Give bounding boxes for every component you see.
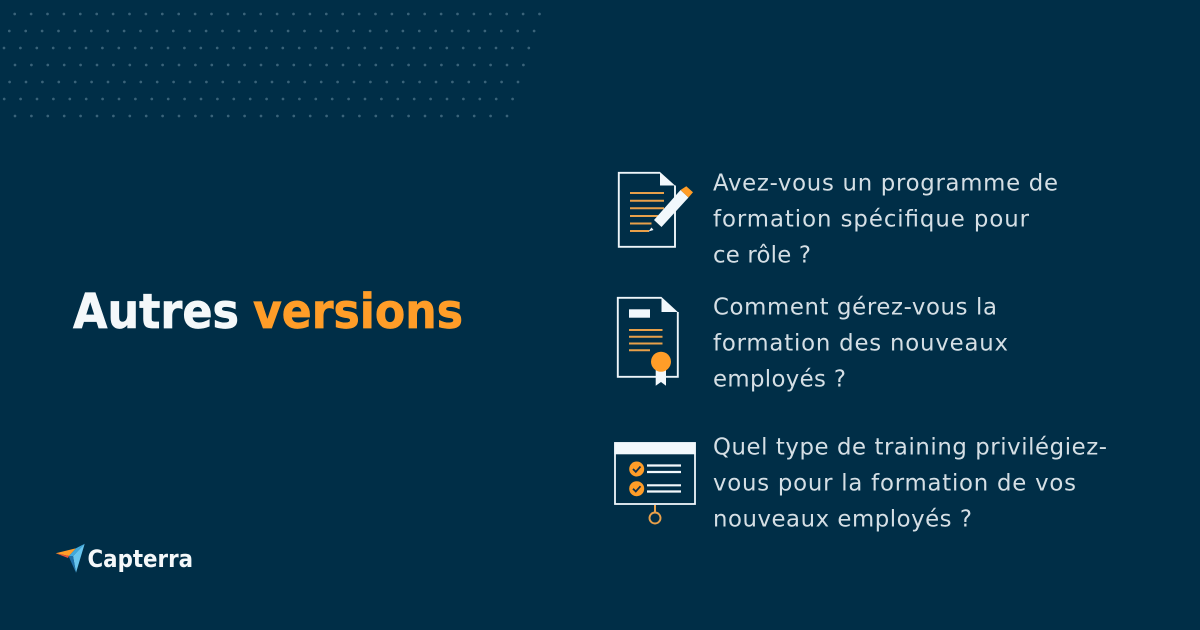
icon: document with pencil xyxy=(619,172,693,247)
heading: Autres xyxy=(73,284,239,340)
text block: question 2 xyxy=(713,295,1008,393)
text block: question 2: Comment gérez-vous la xyxy=(713,295,997,321)
text block: question 3: Quel type de training privilégiez- xyxy=(713,435,1107,461)
heading: versions xyxy=(253,284,463,340)
icon: presentation checklist xyxy=(614,442,696,524)
text block: question 1: formation spécifique pour xyxy=(713,207,1030,233)
text block: question 2: formation des nouveaux xyxy=(713,331,1008,357)
logo: Capterra xyxy=(56,544,193,573)
text block: question 3: nouveaux employés ? xyxy=(713,507,972,533)
text block: question 3: vous pour la formation de vos xyxy=(713,471,1076,497)
text block: question 1: ce rôle ? xyxy=(713,243,811,269)
text block: question 1: Avez-vous un programme de xyxy=(713,171,1058,197)
text block: question 3 xyxy=(713,435,1107,533)
dot pattern background xyxy=(4,14,540,116)
text block: question 2: employés ? xyxy=(713,367,846,393)
heading xyxy=(73,284,463,340)
logo: Capterra: Capterra xyxy=(88,545,193,573)
text block: question 1 xyxy=(713,171,1058,269)
icon: certificate document xyxy=(618,297,678,386)
